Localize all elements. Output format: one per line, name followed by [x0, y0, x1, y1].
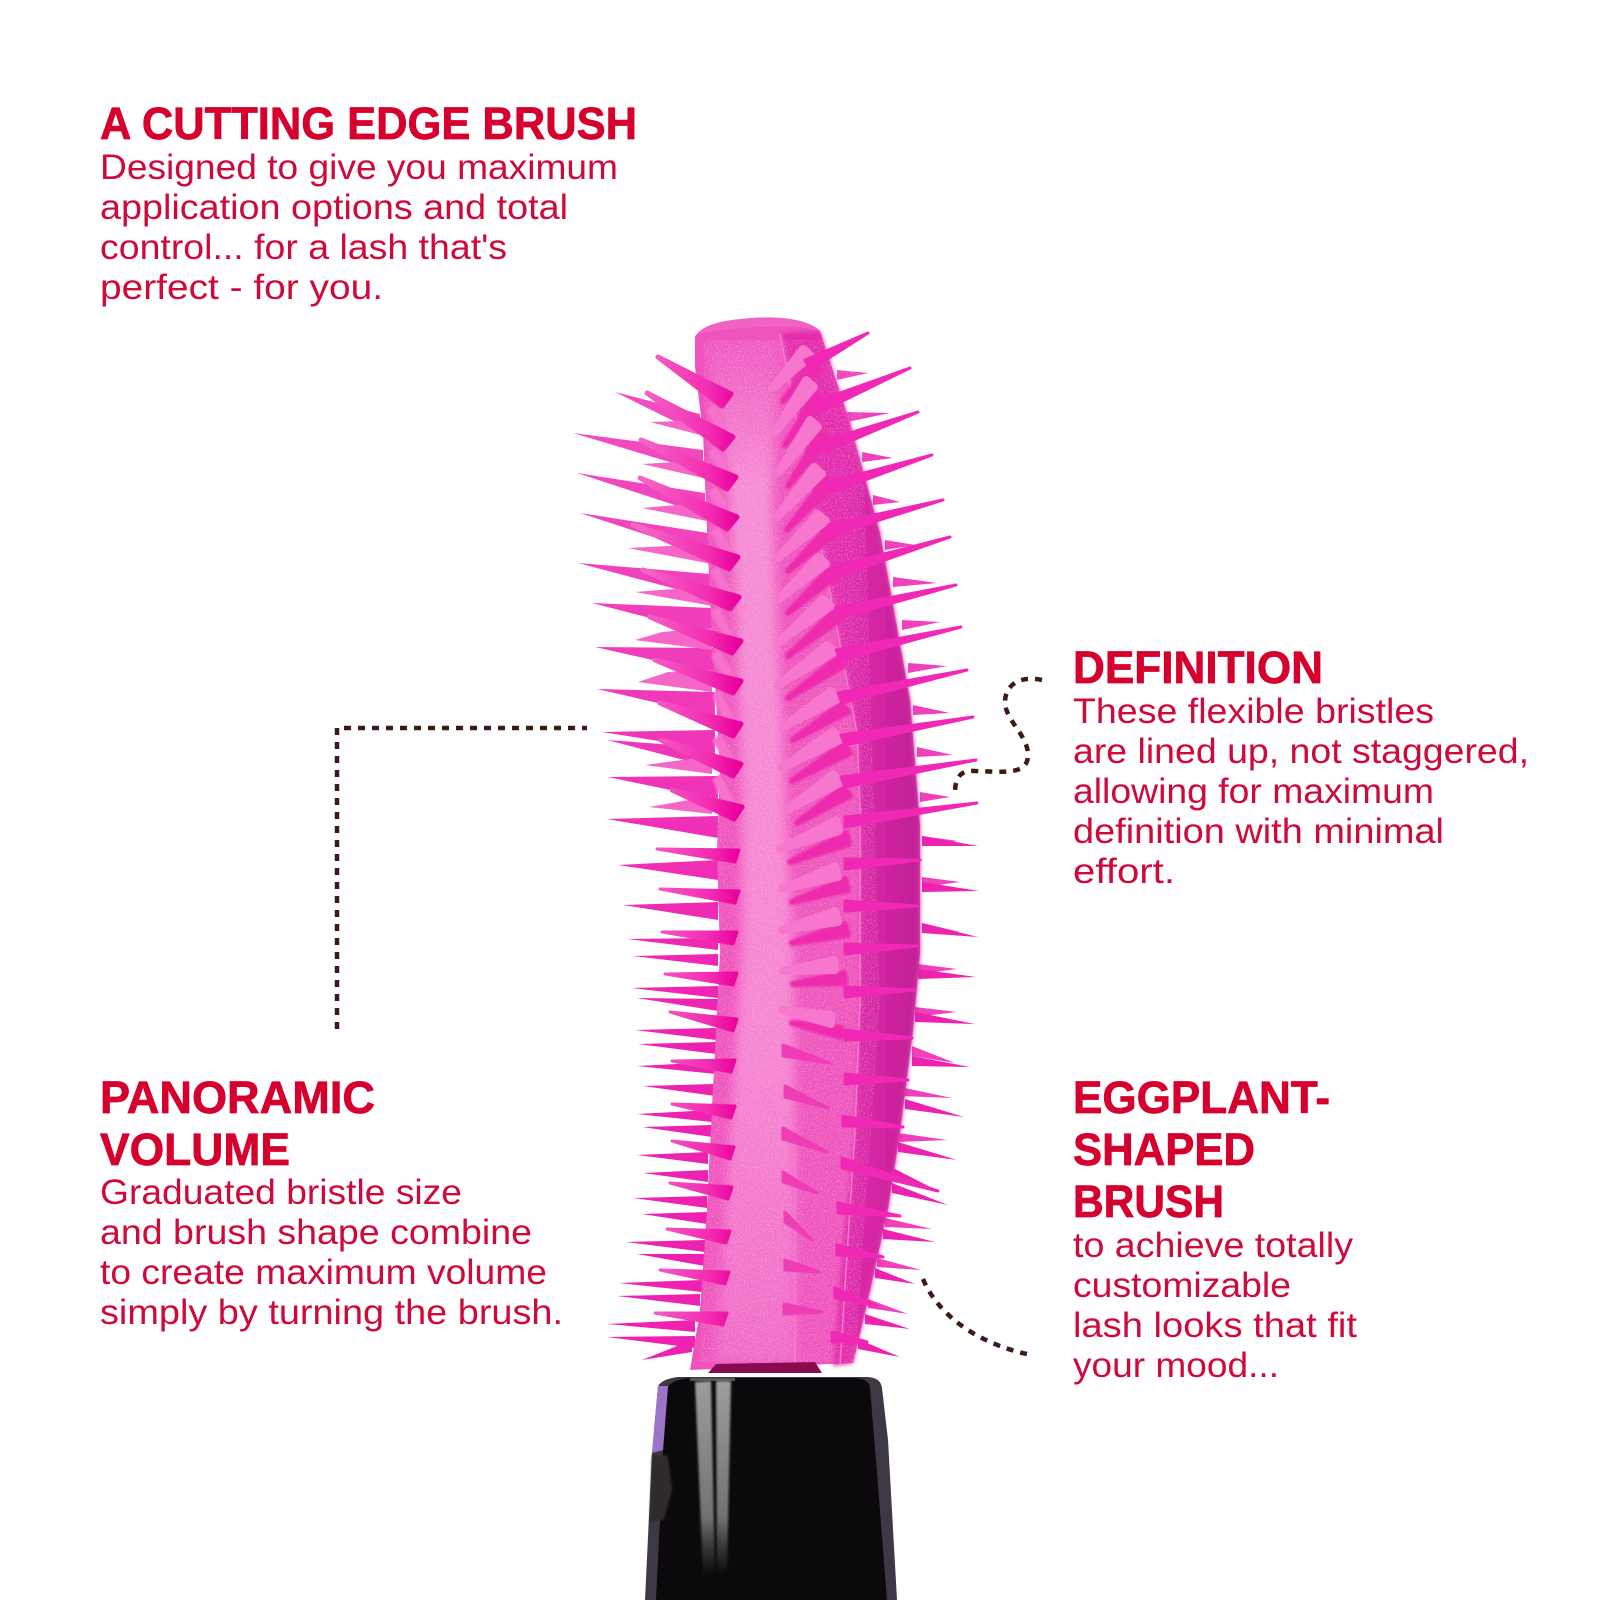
dark rim at brush base	[708, 1362, 822, 1373]
text block: a cutting edge brush	[100, 98, 637, 307]
heading: DEFINITION	[1073, 642, 1323, 693]
body copy: Graduated bristle size	[100, 1173, 462, 1212]
body copy: Designed to give you maximum	[100, 148, 618, 187]
cap: top edge shine	[690, 1378, 735, 1381]
left front bristles on core	[633, 357, 742, 1325]
heading: SHAPED	[1073, 1124, 1255, 1175]
body copy: definition with minimal	[1073, 812, 1444, 851]
black wand cap	[645, 1377, 897, 1600]
cap: vertical highlights	[695, 1381, 715, 1575]
body copy: effort.	[1073, 852, 1175, 891]
body copy: customizable	[1073, 1266, 1291, 1305]
left long bristles behind the core	[573, 392, 718, 1360]
body copy: simply by turning the brush.	[100, 1293, 563, 1332]
body copy: application options and total	[100, 188, 568, 227]
text block: panoramic volume	[100, 1072, 563, 1332]
core: speckle texture	[700, 340, 880, 1362]
body copy	[100, 148, 618, 307]
heading: BRUSH	[1073, 1176, 1224, 1227]
heading	[100, 1072, 375, 1175]
cap: black body	[656, 1378, 887, 1600]
text block: definition	[1073, 642, 1529, 891]
callout line: eggplant-shaped brush	[923, 1279, 1027, 1354]
heading: EGGPLANT-	[1073, 1072, 1330, 1123]
core: dark magenta side band	[782, 331, 920, 1366]
callout line: definition	[955, 679, 1042, 793]
brush core	[690, 317, 920, 1370]
text block: eggplant-shaped brush	[1073, 1072, 1357, 1385]
right outer bristle tips behind the core	[837, 370, 979, 1357]
heading	[1073, 1072, 1330, 1227]
centre cone bristles (lower)	[783, 1045, 830, 1314]
cap: purple edge reflection	[652, 1386, 668, 1453]
body copy	[1073, 692, 1529, 891]
core: light centre band	[708, 340, 795, 1362]
callout line: panoramic volume	[337, 728, 587, 1029]
heading: PANORAMIC	[100, 1072, 375, 1123]
centre bristle shadows	[783, 362, 850, 1037]
heading: A CUTTING EDGE BRUSH	[100, 98, 637, 149]
centre cone bristles (upper)	[773, 349, 840, 1024]
right front bristles	[805, 333, 977, 1342]
body copy: your mood...	[1073, 1346, 1279, 1385]
body copy: and brush shape combine	[100, 1213, 532, 1252]
body copy: perfect - for you.	[100, 268, 383, 307]
mascara brush photo illustration	[573, 317, 979, 1600]
body copy: to create maximum volume	[100, 1253, 547, 1292]
cap: chipped edge	[650, 1455, 672, 1522]
body copy: control... for a lash that's	[100, 228, 507, 267]
body copy: to achieve totally	[1073, 1226, 1354, 1265]
body copy	[100, 1173, 563, 1332]
core: cap rim	[697, 317, 820, 334]
core: seam lines	[780, 334, 860, 1365]
body copy	[1073, 1226, 1357, 1385]
body copy: These flexible bristles	[1073, 692, 1434, 731]
body copy: lash looks that fit	[1073, 1306, 1357, 1345]
body copy: allowing for maximum	[1073, 772, 1434, 811]
left root stubs	[706, 404, 735, 808]
heading: VOLUME	[100, 1124, 290, 1175]
light secondary bristles	[628, 420, 712, 814]
body copy: are lined up, not staggered,	[1073, 732, 1529, 771]
